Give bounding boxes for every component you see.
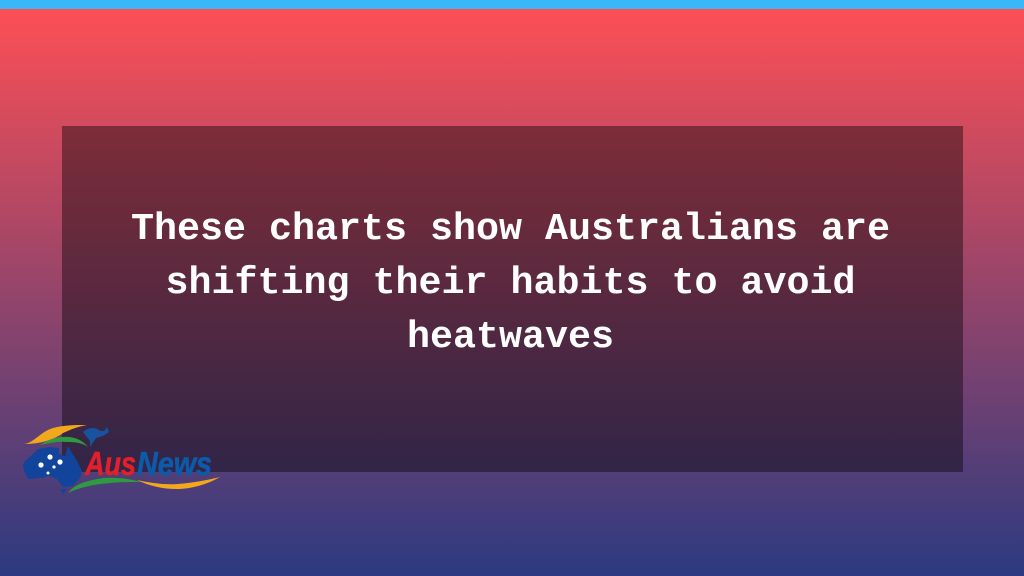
icon: kangaroo	[83, 427, 109, 447]
icon: yellow and green swoosh	[24, 425, 88, 447]
logo wordmark: News	[137, 445, 212, 482]
headline	[131, 207, 890, 359]
icon: lower swoosh	[68, 477, 220, 493]
logo: AusNews	[23, 425, 220, 494]
logo wordmark: Aus	[84, 445, 136, 482]
panel: headline backdrop	[62, 126, 963, 472]
top accent bar	[0, 0, 1024, 9]
headline: These charts show Australians are	[131, 207, 890, 251]
logo wordmark	[84, 445, 212, 482]
icon: Australia map with stars	[23, 446, 82, 494]
headline: heatwaves	[407, 315, 614, 359]
headline: shifting their habits to avoid	[165, 261, 856, 305]
